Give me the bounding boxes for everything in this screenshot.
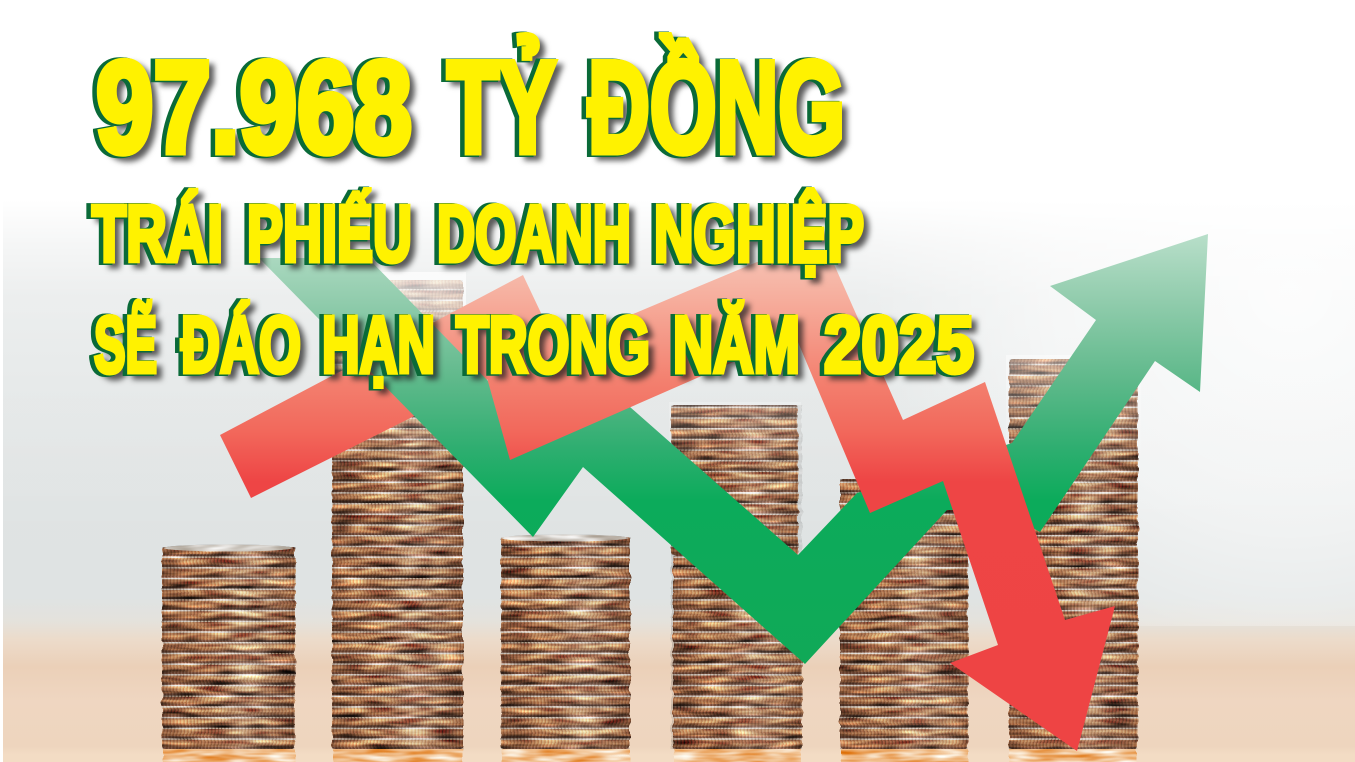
title: maturity line: HẠN [322, 300, 435, 389]
title: maturity line: ĐÁO [181, 300, 301, 389]
title: maturity line: TRONG [456, 300, 650, 389]
white haze fading the tops of the tall coin stacks [329, 272, 1141, 470]
coin stack 3 [501, 534, 630, 762]
title: corporate bonds line: TRÁI [92, 189, 223, 278]
coin stack 1 [162, 544, 295, 762]
title: maturity line: NĂM [673, 300, 800, 389]
title: amount: 97.968 [96, 34, 412, 180]
title: maturity line: SẼ [94, 300, 157, 389]
coin stack 5 [840, 479, 968, 762]
coin stack 4 [671, 405, 802, 762]
title: maturity line: 2025 [824, 300, 974, 389]
coin stack 2 [332, 280, 463, 762]
coin stack 6 [1009, 359, 1138, 762]
coin stacks [162, 280, 1138, 762]
title: amount: TỶ [447, 34, 556, 180]
title: corporate bonds line: DOANH [437, 189, 631, 278]
title: amount: ĐỒNG [588, 34, 845, 180]
arrow: red falling line, main segment and head [487, 262, 1115, 751]
title: maturity line [94, 300, 974, 389]
title: corporate bonds line [92, 189, 864, 278]
arrow: red falling line, first segment [220, 275, 558, 498]
title: amount [96, 34, 845, 180]
arrow: green rising line [259, 234, 1208, 664]
title: corporate bonds line: NGHIỆP [654, 189, 864, 278]
title: corporate bonds line: PHIẾU [247, 189, 412, 278]
